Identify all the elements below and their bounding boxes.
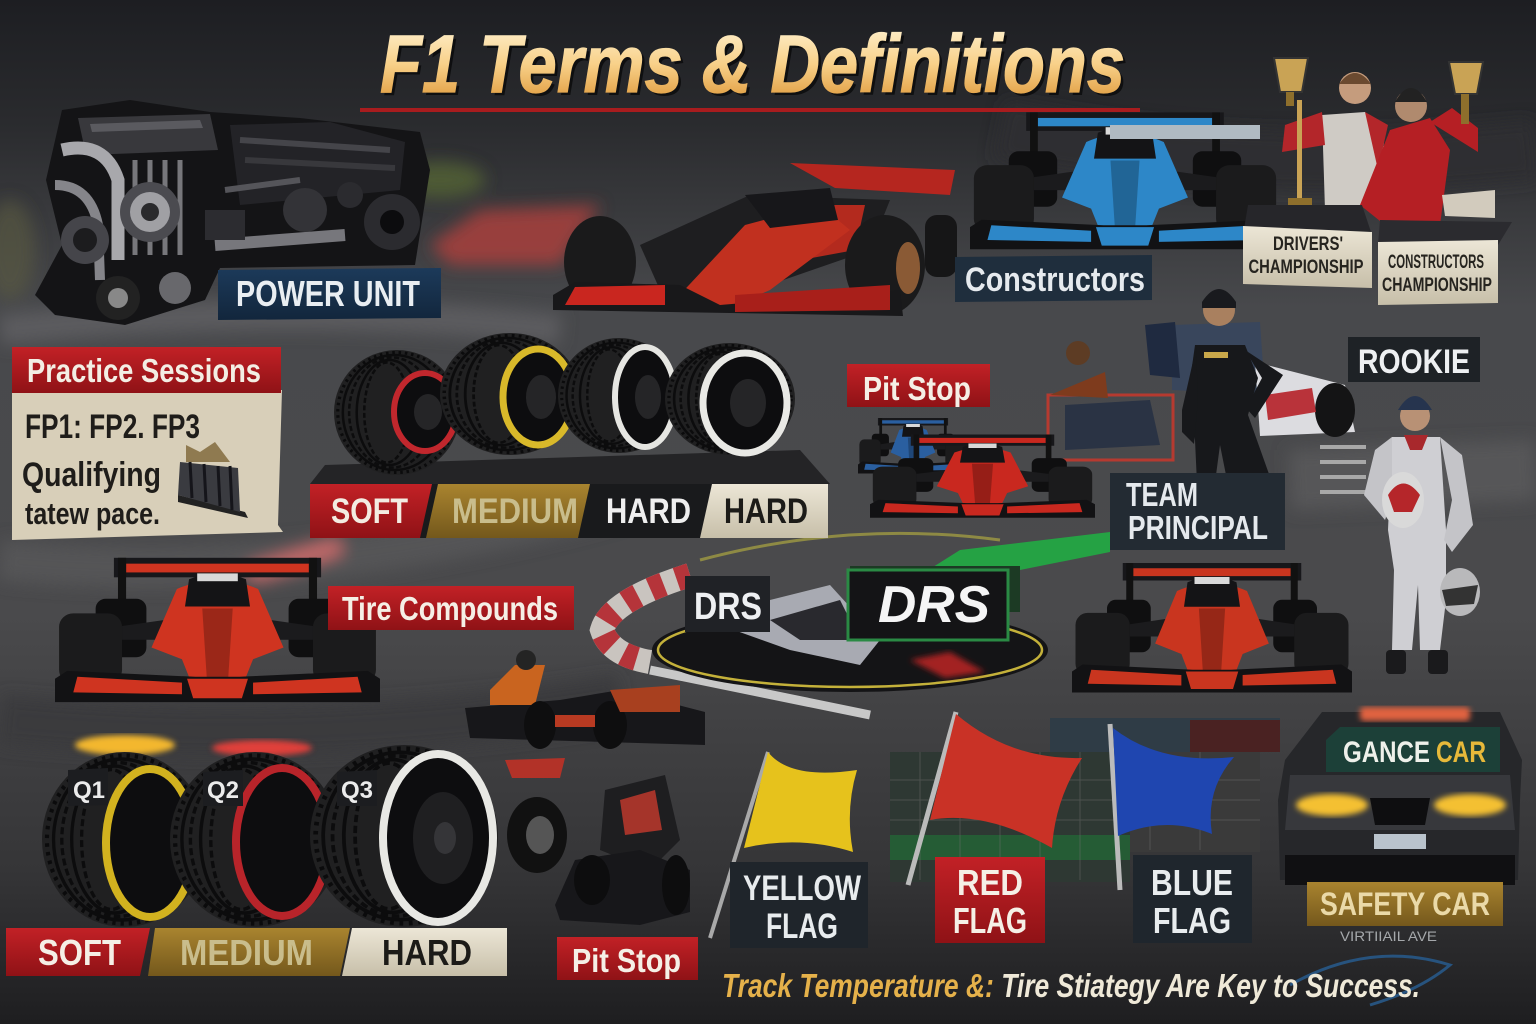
label: team principal: TEAM (1126, 476, 1198, 513)
trophy: right (1449, 62, 1483, 124)
pit crew working on car (465, 650, 705, 749)
panel: fence backdrop (890, 718, 1280, 882)
panel: practice sessions: FP1: FP2. FP3 (25, 408, 200, 446)
label: rookie: ROOKIE (1358, 343, 1470, 381)
label: team principal (1110, 473, 1285, 550)
label: blue flag (1133, 855, 1252, 943)
mechanic and pit cars (505, 758, 690, 925)
label: power unit: POWER UNIT (236, 273, 420, 314)
label: pit stop upper: Pit Stop (863, 370, 971, 407)
icon: yellow flag (710, 752, 857, 938)
tire: soft (334, 350, 460, 475)
tire labels: top strip: HARD (724, 492, 808, 531)
pit stop car scene (858, 341, 1173, 518)
safety car (1278, 707, 1522, 885)
white team car background (1145, 322, 1355, 437)
tire labels: bottom strip: HARD (382, 932, 472, 973)
tire: medium (440, 333, 580, 455)
icon: helmet at side (1440, 568, 1480, 616)
trophy: left (1274, 58, 1312, 208)
label: Q3: Q3 (341, 777, 373, 804)
label: constructors (955, 255, 1152, 302)
title: F1 Terms & Definitions (383, 22, 1128, 113)
label: safety car: SAFETY CAR (1320, 886, 1490, 922)
tire: medium red band (170, 752, 340, 927)
panel: practice sessions: Practice Sessions (27, 352, 261, 389)
label: drivers' championship: CHAMPIONSHIP (1248, 257, 1364, 278)
label: team principal: PRINCIPAL (1128, 509, 1268, 546)
title: F1 Terms & Definitions (380, 19, 1125, 110)
label: power unit (218, 268, 441, 320)
panel: practice sessions: tatew pace. (25, 496, 160, 531)
drivers on podium with trophies (1243, 58, 1512, 245)
label: virtual safety car: VIRTIIAIL AVE (1340, 928, 1437, 944)
label: drivers' championship: DRIVERS' (1273, 234, 1343, 255)
label: yellow flag: YELLOW (743, 869, 861, 908)
tire: hard second (665, 343, 795, 455)
person: rookie driver (1364, 396, 1480, 674)
person: team principal (1182, 289, 1283, 505)
label: yellow flag: FLAG (766, 907, 838, 946)
DRS scene (685, 566, 1020, 665)
label: Q1 (68, 768, 108, 806)
icon: power unit engine (35, 100, 430, 325)
label: DRS small: DRS (694, 586, 762, 628)
tire set: top row (310, 333, 830, 484)
label: tire compounds: Tire Compounds (342, 590, 558, 627)
label: drivers' championship (1243, 226, 1372, 288)
label: constructors championship: CHAMPIONSHIP (1382, 275, 1492, 296)
tire labels: bottom strip (6, 928, 507, 976)
tire: hard white band (310, 745, 498, 927)
label: Q2: Q2 (207, 777, 239, 804)
label: red flag: RED (957, 862, 1023, 903)
footer tagline: Track Temperature &: Tire Stiategy Are Key to Success. (722, 967, 1420, 1004)
label: pit stop lower: Pit Stop (572, 942, 681, 979)
label: gance car (1326, 727, 1500, 772)
tire labels: bottom strip: SOFT (38, 932, 121, 973)
label: red flag (935, 857, 1045, 943)
icon: helmet in hand (1382, 472, 1424, 528)
blue constructor car (970, 112, 1280, 249)
label: blue flag: FLAG (1153, 900, 1231, 941)
tire labels: bottom strip: MEDIUM (180, 932, 313, 973)
tire set: bottom row (42, 735, 498, 927)
panel: practice sessions (12, 347, 283, 540)
label: gance car: GANCE (1343, 736, 1430, 769)
label: DRS sign (848, 566, 1020, 640)
label: gance car: CAR (1436, 736, 1486, 769)
red race car (553, 163, 957, 316)
tire: hard (558, 338, 680, 453)
label: blue flag: BLUE (1151, 862, 1233, 903)
tire labels: top strip (310, 484, 828, 538)
label: constructors: Constructors (965, 261, 1145, 299)
beacon: amber light (75, 735, 175, 755)
label: red flag: FLAG (953, 900, 1027, 941)
orange race car: left (55, 558, 380, 702)
label: Q3 (337, 770, 377, 806)
beacon: red light (212, 740, 312, 756)
label: Q2 (203, 770, 243, 806)
label: constructors championship (1378, 240, 1498, 305)
label: DRS sign: DRS (878, 576, 990, 634)
tire labels: top strip: MEDIUM (452, 492, 578, 531)
tire labels: top strip: SOFT (331, 492, 408, 531)
panel: practice sessions: Qualifying (22, 456, 161, 494)
tire labels: top strip: HARD (606, 492, 691, 531)
label: yellow flag (730, 862, 868, 948)
tire: soft yellow band (42, 752, 207, 927)
icon: red flag (908, 712, 1082, 885)
label: Q1: Q1 (73, 777, 105, 804)
label: DRS small (685, 576, 770, 632)
orange race car: right (1072, 563, 1352, 692)
icon: garage model (178, 442, 248, 518)
icon: blue flag (1110, 724, 1234, 890)
